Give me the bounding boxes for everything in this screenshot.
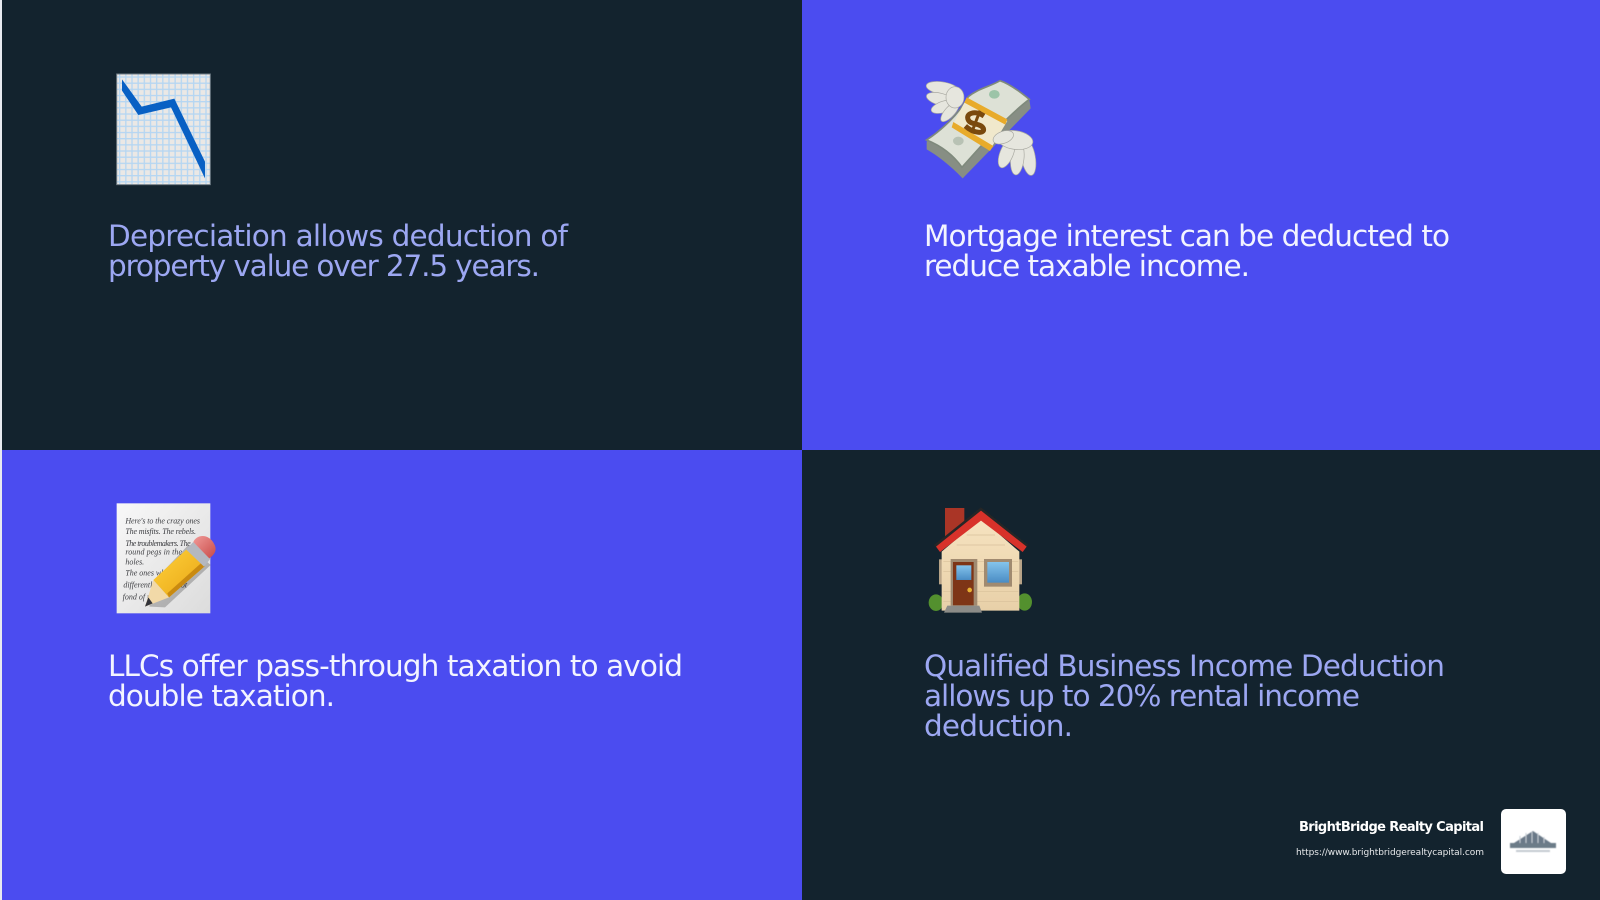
icon: memo and pencil: fond of rules	[123, 592, 163, 601]
brand url: https://www.brightbridgerealtycapital.com	[1296, 848, 1484, 858]
text: qualified business income: allows up to 20% rental income	[924, 679, 1360, 713]
brand name: BrightBridge Realty Capital	[1299, 820, 1484, 835]
panel: qualified business income	[802, 450, 1600, 900]
text: mortgage interest: Mortgage interest can be deducted to	[924, 219, 1450, 253]
icon: money with wings	[925, 79, 1038, 178]
panel: llcs	[0, 450, 802, 900]
left edge strip	[0, 0, 2, 900]
icon: memo and pencil: The ones who see	[125, 568, 182, 577]
text: depreciation	[108, 219, 569, 283]
text: qualified business income	[924, 649, 1445, 743]
text: qualified business income: deduction.	[924, 709, 1073, 743]
icon: memo and pencil: Here's to the crazy ones	[124, 516, 200, 525]
logo	[1501, 809, 1566, 874]
panel: mortgage interest	[802, 0, 1600, 450]
icon: memo and pencil: round pegs in the	[125, 548, 182, 557]
text: llcs: double taxation.	[108, 679, 335, 713]
text: mortgage interest: reduce taxable income.	[924, 249, 1250, 283]
icon: chart decreasing	[117, 74, 210, 185]
icon: memo and pencil: The troublemakers. The	[125, 539, 191, 548]
brand footer	[1296, 809, 1566, 874]
icon: memo and pencil: The misfits. The rebels.	[125, 527, 196, 536]
icon: house	[929, 507, 1032, 613]
text: mortgage interest	[924, 219, 1450, 283]
icon: memo and pencil: differently. They not	[123, 580, 188, 589]
icon: memo and pencil	[117, 503, 216, 613]
text: qualified business income: Qualified Business Income Deduction	[924, 649, 1445, 683]
text: depreciation: Depreciation allows deduction of	[108, 219, 569, 253]
text: llcs	[108, 649, 683, 713]
text: llcs: LLCs offer pass-through taxation to avoid	[108, 649, 683, 683]
icon: memo and pencil: holes.	[125, 558, 144, 567]
text: depreciation: property value over 27.5 years.	[108, 249, 540, 283]
panel: depreciation	[0, 0, 802, 450]
